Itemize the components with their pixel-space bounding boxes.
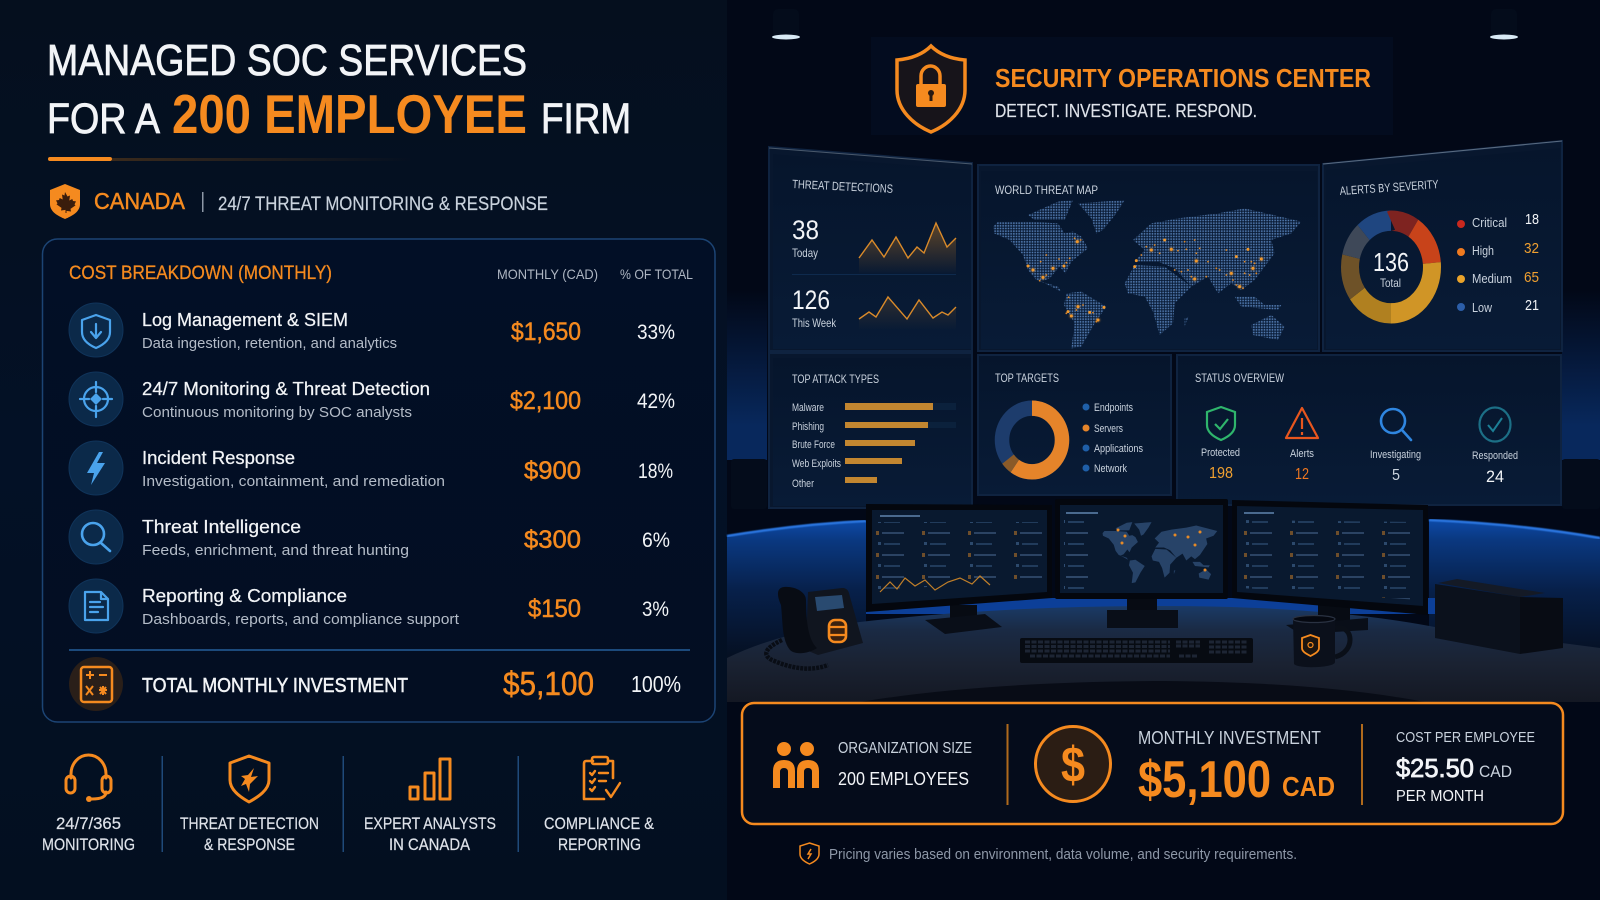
row: reporting and compliance: Dashboards, reports, and compliance support — [142, 611, 460, 628]
cost per employee: COST PER EMPLOYEE — [1396, 729, 1535, 746]
panel: alerts by severity — [1323, 141, 1562, 351]
panel: status overview: STATUS OVERVIEW — [1195, 373, 1284, 385]
row: threat intelligence: $300 — [524, 526, 581, 554]
monitor: left — [866, 504, 1052, 634]
status: responded — [1472, 408, 1518, 486]
ceiling lights — [772, 9, 1518, 40]
legend: severity: High — [1472, 243, 1494, 258]
chart: attack bars: Brute Force — [792, 439, 835, 451]
status: protected — [1201, 407, 1240, 482]
status: alerts: 12 — [1295, 466, 1309, 483]
panel: top targets: TOP TARGETS — [995, 373, 1059, 385]
feature: compliance and reporting: REPORTING — [558, 835, 641, 854]
title: 200 EMPLOYEE — [172, 83, 527, 145]
status: protected: 198 — [1209, 465, 1233, 482]
legend: targets: Servers — [1094, 423, 1123, 435]
title — [47, 36, 631, 145]
legend: severity: Medium — [1472, 271, 1512, 286]
panel: top attack types — [769, 353, 972, 508]
column headings: % OF TOTAL — [620, 266, 693, 282]
legend: severity: 65 — [1524, 269, 1539, 286]
chart: this week sparkline — [859, 297, 956, 330]
feature: expert analysts: EXPERT ANALYSTS — [364, 814, 496, 833]
row: threat intelligence: Feeds, enrichment, and threat hunting — [142, 542, 409, 559]
header: security operations center: DETECT. INVESTIGATE. RESPOND. — [995, 101, 1257, 121]
panel: investment summary — [742, 703, 1563, 824]
status: investigating: 5 — [1392, 467, 1400, 484]
legend: targets: Network — [1094, 463, 1127, 475]
row: reporting and compliance: $150 — [528, 595, 581, 623]
chart: attack bars: Phishing — [792, 421, 824, 433]
row: monitoring: Continuous monitoring by SOC analysts — [142, 404, 412, 421]
header: security operations center — [897, 46, 1371, 132]
feature: expert analysts: IN CANADA — [389, 835, 471, 854]
cost per employee: CAD — [1479, 762, 1512, 781]
column headings: MONTHLY (CAD) — [497, 266, 598, 282]
row: log management: Log Management & SIEM — [142, 310, 348, 330]
row: incident response: $900 — [524, 457, 581, 485]
row: incident response — [69, 441, 673, 495]
feature: 24/7/365 monitoring: 24/7/365 — [56, 814, 121, 833]
icon: mug — [1293, 616, 1350, 667]
monthly investment: CAD — [1282, 771, 1335, 802]
monthly investment — [1036, 726, 1335, 809]
monthly investment: MONTHLY INVESTMENT — [1138, 728, 1321, 748]
legend: severity: 32 — [1524, 240, 1539, 257]
row: log management: Data ingestion, retention, and analytics — [142, 335, 397, 352]
status: responded: Responded — [1472, 450, 1518, 462]
legend: targets — [1082, 402, 1143, 475]
chart: attack bars: Malware — [792, 402, 824, 414]
subtitle row: Canada: CANADA — [94, 188, 186, 214]
monitor: right — [1232, 500, 1428, 634]
panel: threat detections: 38 — [792, 215, 819, 245]
footnote: Pricing varies based on environment, data volume, and security requirements. — [829, 847, 1297, 863]
icon: shield with padlock — [897, 46, 965, 132]
row: log management: 33% — [637, 321, 675, 344]
footnote — [800, 843, 1297, 864]
equipment box — [1435, 579, 1563, 654]
row: incident response: Incident Response — [142, 448, 295, 468]
feature: 24/7/365 monitoring — [42, 755, 135, 854]
panel: threat detections: Today — [792, 246, 818, 260]
status: responded: 24 — [1486, 467, 1504, 486]
panel: threat detections — [769, 147, 972, 351]
status: investigating — [1370, 409, 1421, 484]
panel: status overview — [1177, 355, 1561, 505]
legend: severity: Critical — [1472, 215, 1507, 230]
row: reporting and compliance — [69, 579, 669, 633]
monitor: centre — [1055, 499, 1228, 628]
heading: cost breakdown: COST BREAKDOWN (MONTHLY) — [69, 263, 332, 284]
legend: targets: Applications — [1094, 443, 1143, 455]
column headings — [497, 266, 693, 282]
row: monitoring: 42% — [637, 390, 675, 413]
legend: severity — [1457, 211, 1539, 315]
cost per employee — [1396, 729, 1535, 805]
panel: world threat map — [978, 165, 1319, 351]
feature: threat detection and response — [180, 756, 319, 854]
subtitle row: Canada — [50, 184, 548, 219]
chart: today sparkline — [859, 223, 956, 274]
panel: threat detections: 126 — [792, 285, 830, 315]
cost per employee: PER MONTH — [1396, 788, 1484, 805]
legend: severity: Low — [1472, 300, 1493, 315]
title: FOR A — [47, 95, 160, 143]
title: FIRM — [541, 95, 631, 143]
row: total monthly investment: $5,100 — [503, 665, 594, 702]
icon: small shield — [800, 843, 819, 864]
legend: severity: 18 — [1525, 211, 1539, 228]
row: reporting and compliance: 3% — [642, 598, 669, 621]
chart: severity donut — [1350, 221, 1432, 313]
title: MANAGED SOC SERVICES — [47, 36, 527, 85]
chart: attack bars: Web Exploits — [792, 458, 841, 470]
icon: desk phone — [766, 587, 863, 669]
organization size — [773, 740, 972, 789]
panel: threat detections: THREAT DETECTIONS — [792, 177, 893, 196]
row: monitoring: $2,100 — [510, 387, 581, 415]
blue wall light — [727, 520, 1600, 660]
feature: threat detection and response: THREAT DETECTION — [180, 814, 319, 833]
row: total monthly investment: 100% — [631, 671, 681, 697]
legend: targets: Endpoints — [1094, 402, 1133, 414]
feature: threat detection and response: & RESPONSE — [204, 835, 295, 854]
row: monitoring: 24/7 Monitoring & Threat Detection — [142, 379, 430, 399]
row: threat intelligence — [69, 510, 670, 564]
row: reporting and compliance: Reporting & Compliance — [142, 586, 347, 606]
icon: dollar coin — [1036, 726, 1110, 802]
legend: severity: 21 — [1525, 297, 1539, 314]
icon: Canada shield — [50, 184, 80, 219]
panel: alerts by severity: ALERTS BY SEVERITY — [1339, 177, 1439, 198]
panel: top targets — [978, 355, 1171, 495]
panel: alerts by severity: Total — [1380, 276, 1401, 290]
row: log management: $1,650 — [511, 318, 581, 346]
title underline — [48, 157, 412, 161]
row: threat intelligence: Threat Intelligence — [142, 517, 301, 537]
feature: expert analysts — [364, 759, 496, 854]
organization size: 200 EMPLOYEES — [838, 769, 969, 789]
row: monitoring — [69, 372, 675, 426]
video wall — [769, 141, 1562, 508]
panel: cost breakdown — [42, 239, 715, 722]
desk — [727, 606, 1600, 702]
feature: compliance and reporting — [544, 757, 655, 854]
row: incident response: Investigation, containment, and remediation — [142, 473, 445, 490]
row: threat intelligence: 6% — [642, 529, 670, 552]
status: alerts: Alerts — [1290, 448, 1314, 460]
feature: 24/7/365 monitoring: MONITORING — [42, 835, 135, 854]
panel: alerts by severity: 136 — [1373, 247, 1409, 277]
panel: world threat map: WORLD THREAT MAP — [995, 183, 1098, 197]
status: alerts — [1286, 408, 1318, 483]
row: total monthly investment — [69, 657, 681, 711]
row: total monthly investment: TOTAL MONTHLY INVESTMENT — [142, 675, 408, 697]
monthly investment: $5,100 — [1138, 751, 1271, 809]
icon: dollar coin: $ — [1061, 737, 1085, 793]
cost per employee: $25.50 — [1396, 753, 1474, 783]
feature: compliance and reporting: COMPLIANCE & — [544, 814, 655, 833]
chart: attack bars — [792, 402, 956, 490]
features strip — [42, 755, 655, 854]
icon: people — [773, 742, 819, 788]
panel: threat detections: This Week — [792, 316, 837, 330]
chart: attack bars: Other — [792, 478, 814, 490]
subtitle row: Canada: 24/7 THREAT MONITORING & RESPONSE — [218, 194, 548, 215]
row: incident response: 18% — [638, 460, 673, 483]
status: protected: Protected — [1201, 447, 1240, 459]
desk scene — [727, 499, 1600, 702]
chart: targets donut — [1002, 408, 1062, 472]
keyboard — [1020, 638, 1253, 663]
status: investigating: Investigating — [1370, 449, 1421, 461]
panel: top attack types: TOP ATTACK TYPES — [792, 374, 879, 386]
chart: dotted world map — [993, 200, 1301, 348]
organization size: ORGANIZATION SIZE — [838, 740, 972, 757]
header: security operations center: SECURITY OPERATIONS CENTER — [995, 63, 1371, 93]
row: log management — [69, 303, 675, 357]
